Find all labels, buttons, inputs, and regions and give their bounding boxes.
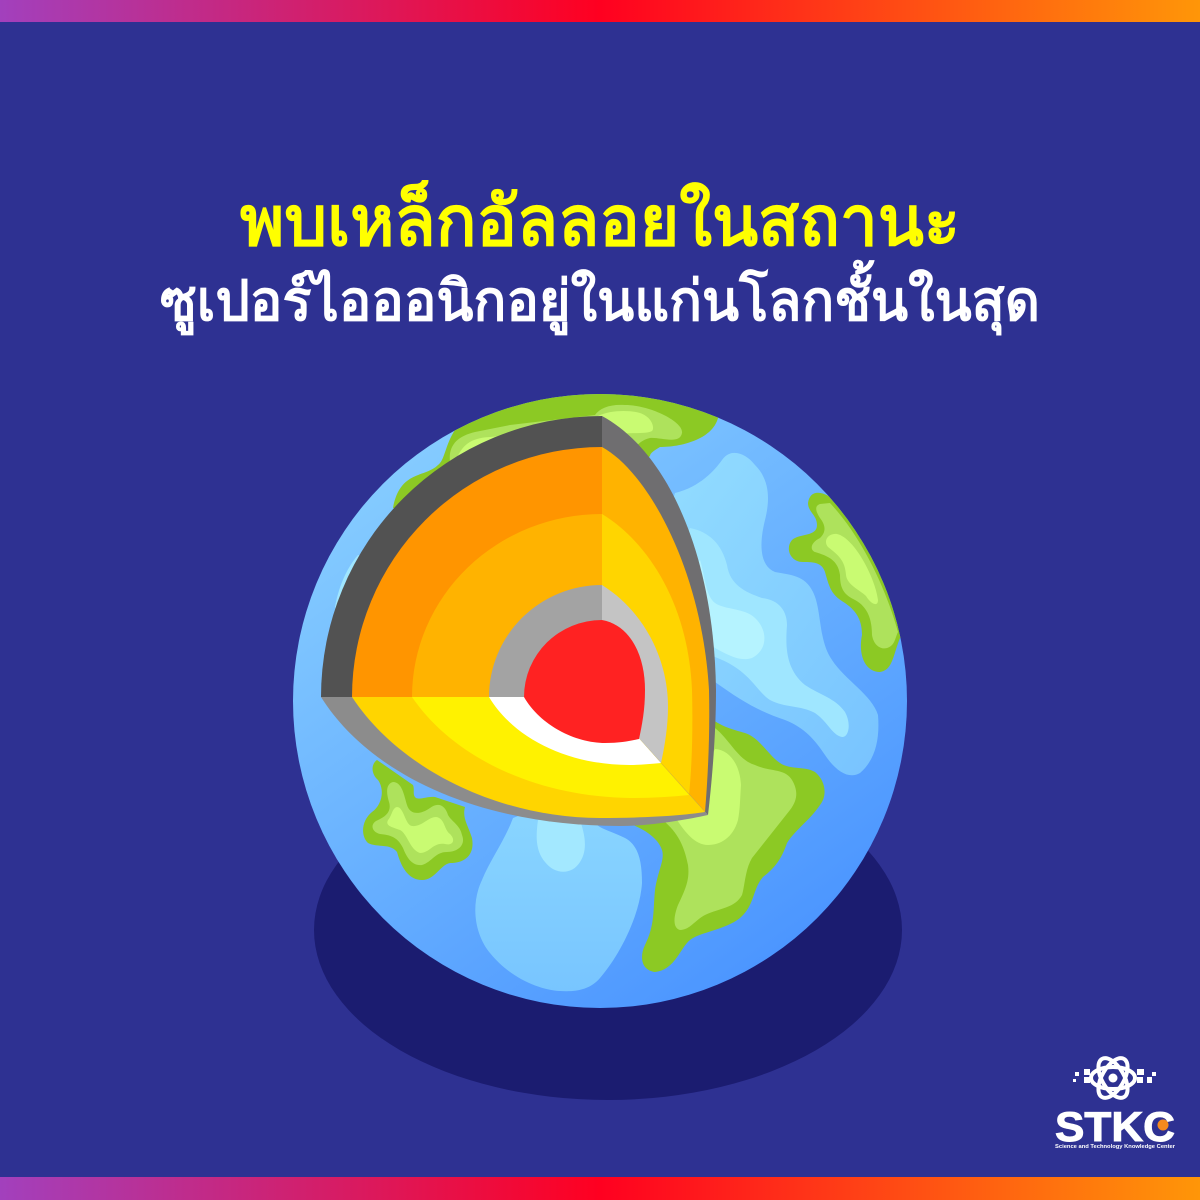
cut face right [602, 416, 716, 815]
cut face left [321, 416, 602, 697]
logo atom icon [1091, 1053, 1135, 1103]
inner core [524, 620, 645, 743]
continent right [788, 492, 900, 672]
top gradient bar [0, 0, 1200, 22]
title line 2: ซูเปอร์ไอออนิกอยู่ในแก่นโลกชั้นในสุด [160, 260, 1040, 336]
logo pixel dots [1073, 1069, 1156, 1083]
continent top [393, 394, 718, 508]
globe shadow [314, 760, 902, 1100]
logo orange dot [1158, 1120, 1168, 1130]
title line 1: พบเหล็กอัลลอยในสถานะ [240, 180, 960, 260]
globe ocean [293, 394, 907, 1008]
island lower left [363, 760, 473, 880]
earth cutaway layers [321, 416, 716, 826]
logo tagline: Science and Technology Knowledge Center [1055, 1144, 1176, 1150]
light water areas [335, 453, 878, 991]
logo wordmark: STKC [1055, 1103, 1175, 1150]
cut face bottom [321, 697, 708, 826]
logo STKC [1055, 1053, 1176, 1150]
continent bottom [633, 720, 825, 972]
globe illustration [293, 380, 915, 1008]
bottom gradient bar [0, 1177, 1200, 1200]
